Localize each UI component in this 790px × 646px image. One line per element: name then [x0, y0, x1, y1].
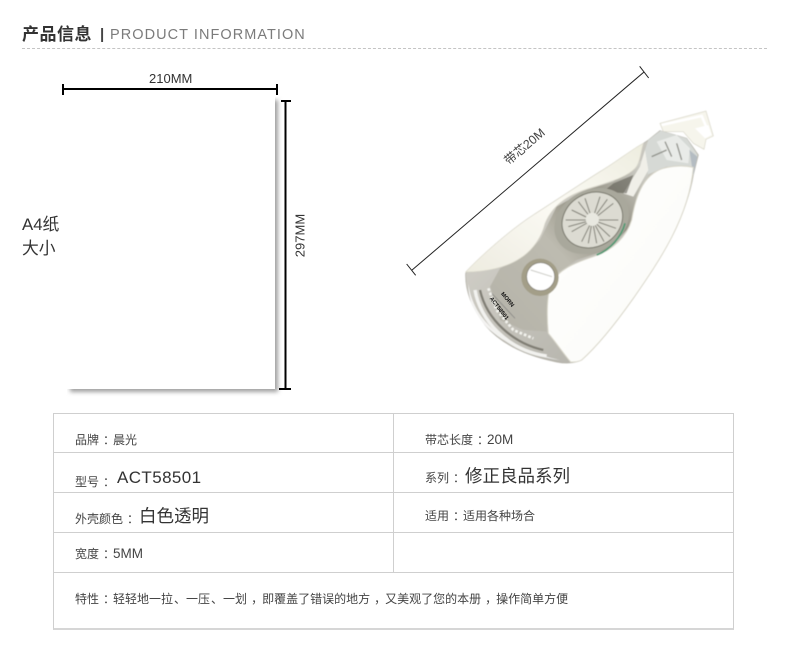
- width spec: 宽度 5MM: [75, 546, 143, 561]
- silver band: [488, 150, 648, 338]
- tape tip cap: [660, 111, 713, 149]
- features: 、: [211, 592, 223, 606]
- heading: product information: |: [100, 26, 104, 43]
- tape reel wheel: [542, 175, 641, 267]
- model print on shell: ACT58501: [488, 296, 509, 321]
- features: 、: [174, 592, 186, 606]
- tape length: ：: [477, 433, 489, 447]
- upper white shell: [466, 143, 643, 272]
- specification table: [53, 413, 734, 630]
- width dimension line: [63, 84, 277, 95]
- features: 特性 轻轻地一拉 一压 一划 即覆盖了错误的地方 又美观了您的本册 操作简单方便: [75, 592, 568, 606]
- height label: 297MM: [292, 214, 308, 257]
- features: ，: [374, 592, 386, 606]
- A4 paper sheet: [55, 85, 280, 395]
- take-up hub hole: [521, 259, 559, 296]
- brand: ：: [103, 433, 115, 447]
- transparent body: [466, 131, 698, 363]
- shell colour: ：: [127, 512, 139, 526]
- correction tape body: [466, 111, 713, 363]
- model print on shell: MORN: [499, 291, 515, 309]
- height dimension line: [279, 101, 291, 389]
- usage: ：: [453, 509, 465, 523]
- features: ，: [485, 592, 497, 606]
- table grid: [53, 413, 734, 630]
- features: ，: [251, 592, 263, 606]
- product illustration: correction tape: [406, 66, 714, 364]
- tape length dimension line: [407, 66, 649, 275]
- A4 paper caption: 大小: [22, 239, 56, 258]
- heading: product information: PRODUCT INFORMATION: [110, 27, 306, 43]
- width label: 210MM: [149, 71, 192, 86]
- A4 paper caption: [22, 215, 59, 258]
- shell colour: 外壳颜色 白色透明: [75, 506, 209, 526]
- series: ：: [453, 471, 465, 485]
- width spec: ：: [103, 547, 115, 561]
- model: ：: [103, 475, 115, 489]
- heading: product information: 产品信息: [22, 25, 92, 44]
- series: 系列 修正良品系列: [425, 466, 570, 486]
- heading: product information: [22, 25, 306, 44]
- tape length: 带芯长度 20M: [425, 432, 513, 447]
- model: 型号 ACT58501: [75, 468, 202, 489]
- brand: 品牌 晨光: [75, 433, 137, 447]
- features: ：: [103, 592, 115, 606]
- paper size diagram: [62, 84, 291, 395]
- A4 paper caption: A4纸: [22, 215, 59, 234]
- usage: 适用 适用各种场合: [425, 509, 535, 523]
- model print on shell: [488, 291, 515, 321]
- lower white shell: [547, 166, 693, 362]
- tape length label: 带芯20M: [502, 126, 548, 168]
